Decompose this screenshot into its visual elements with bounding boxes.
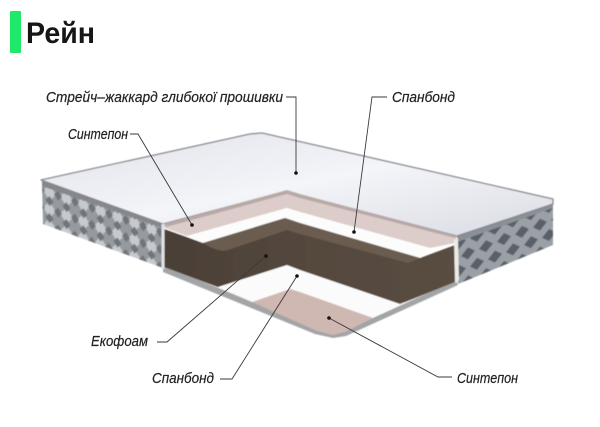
callout: padding top left (68, 126, 194, 227)
panel: left side fabric (42, 182, 163, 268)
foam top band (203, 218, 420, 263)
callout: stretch jacquard: Стрейч–жаккард глибокої прошивки (46, 89, 284, 106)
callout: ecofoam (91, 254, 268, 350)
layer: lower pink padding (252, 289, 373, 335)
layer: foam core (164, 218, 455, 304)
callout: spunbond bottom: Спанбонд (152, 370, 214, 387)
corner fold left (162, 224, 164, 269)
layer: upper pink padding (164, 191, 457, 248)
callout: ecofoam: Екофоам (91, 333, 148, 350)
layer: lower white spunbond (218, 265, 405, 318)
panel: right side fabric (457, 205, 553, 284)
callout: padding bottom right: Синтепон (457, 370, 518, 387)
callout: spunbond bottom (152, 274, 299, 387)
callout: spunbond top (352, 89, 455, 234)
corner fold right (454, 238, 459, 283)
title: Рейн (26, 17, 95, 50)
title accent bar (10, 11, 21, 53)
callout: padding top left: Синтепон (68, 126, 128, 143)
top quilted surface (41, 133, 553, 236)
callout: spunbond top: Спанбонд (392, 89, 455, 106)
left side top band (42, 180, 163, 228)
upper pink shaded edge (164, 190, 457, 238)
callout: stretch jacquard (46, 89, 298, 175)
callout: padding bottom right (327, 316, 518, 387)
bottom rim (163, 265, 458, 338)
right side top band (457, 203, 553, 242)
mattress illustration (41, 133, 553, 338)
layer: upper white spunbond (187, 208, 430, 258)
